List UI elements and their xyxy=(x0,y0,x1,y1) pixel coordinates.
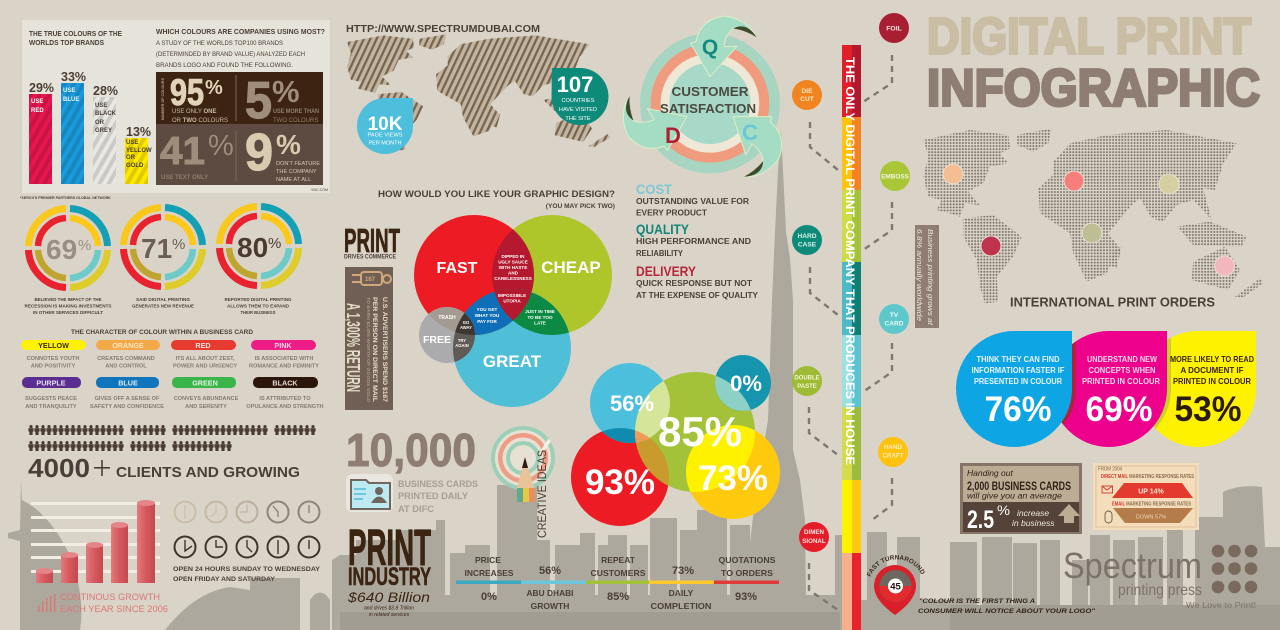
pill: pink xyxy=(249,340,319,370)
ring chart 69%: IN OTHER SERVICES DIFFICULT xyxy=(33,310,103,316)
text: 76%: PRESENTED IN COLOUR xyxy=(974,377,1062,386)
city skyline background xyxy=(8,130,1280,630)
bar: black or grey 28%: GREY xyxy=(95,128,112,134)
pill: red: POWER AND URGENCY xyxy=(173,364,237,370)
finish badge: die cut: DIE xyxy=(802,88,813,95)
bar: yellow or gold 13%: GOLD xyxy=(126,163,144,169)
icon: pencil xyxy=(517,457,535,502)
venn diagram: fast cheap great free: AGAIN xyxy=(455,343,469,348)
pill: yellow: AND POSITIVITY xyxy=(31,364,75,370)
cost quality delivery list: COST xyxy=(636,181,672,197)
icon: person with 167: 167 xyxy=(365,277,376,283)
finish badge: hard case xyxy=(792,225,822,255)
finish badge: tv card: CARD xyxy=(884,320,904,328)
icon: id card xyxy=(346,474,393,512)
stat 9%: % xyxy=(276,129,301,160)
venn diagram: fast cheap great free: YOU GET xyxy=(477,307,498,312)
venn diagram: fast cheap great free: LATE xyxy=(534,320,546,326)
stat 41%: % xyxy=(208,130,234,162)
fast turnaround pin: FAST TURNAROUND xyxy=(866,555,924,576)
opening hours text: OPEN 24 HOURS SUNDAY TO WEDNESDAY xyxy=(173,566,321,573)
customer satisfaction diagram xyxy=(611,16,795,187)
bar: red 29%: RED xyxy=(31,108,44,114)
pill: pink: ROMANCE AND FEMINITY xyxy=(249,364,319,370)
spectrum logo: We Love to Print! xyxy=(1186,600,1256,610)
panel: character of colour xyxy=(21,329,324,410)
spectrum logo: printing press xyxy=(1118,582,1202,599)
pill: black: BLACK xyxy=(272,378,298,388)
ring chart 80%: 80 xyxy=(237,232,268,263)
badge: 107 countries xyxy=(552,68,608,125)
text: 53%: MORE LIKELY TO READ xyxy=(1170,355,1254,364)
business card callout xyxy=(960,463,1082,534)
text: 69%: CONCEPTS WHEN xyxy=(1088,366,1156,375)
clients headline: CLIENTS AND GROWING xyxy=(116,464,300,481)
pill: orange: ORANGE xyxy=(112,341,144,350)
heading: which colours: A STUDY OF THE WORLDS TOP100 BRANDS xyxy=(156,40,284,47)
growth bar chart xyxy=(31,500,168,614)
pill: blue: GIVES OFF A SENSE OF xyxy=(95,396,160,402)
bar: yellow or gold 13% xyxy=(125,125,152,184)
stat 9%: DON'T FEATURE xyxy=(276,161,320,167)
title xyxy=(927,8,1260,118)
finish badge: emboss: EMBOSS xyxy=(881,174,910,180)
arrow: cost xyxy=(710,100,795,187)
stat table: NUMBER OF COLOURS xyxy=(161,77,165,120)
icon: up arrow xyxy=(1058,504,1080,523)
colour statistic teardrops xyxy=(956,331,1256,447)
business card callout: Handing out xyxy=(967,468,1013,478)
venn heading: (YOU MAY PICK TWO) xyxy=(546,203,615,210)
pill: black: IS ATTRIBUTED TO xyxy=(259,396,311,402)
stat 41%: 41 xyxy=(160,130,205,173)
print drives commerce heading: PRINT xyxy=(344,222,400,259)
print drives commerce heading: DRIVES COMMERCE xyxy=(344,254,396,260)
text: 69% xyxy=(1082,355,1160,429)
overlapping percentage circles: 0% xyxy=(730,371,762,396)
timeline statistics: 93% xyxy=(735,591,757,603)
cost quality delivery list: RELIABILITY xyxy=(636,249,684,258)
text: 76%: THINK THEY CAN FIND xyxy=(976,355,1060,364)
bar: yellow or gold 13%: USE xyxy=(126,140,138,146)
text: 69%: PRINTED IN COLOUR xyxy=(1082,377,1160,386)
map caption: INTERNATIONAL PRINT ORDERS xyxy=(1010,296,1215,310)
pill: orange xyxy=(96,340,160,370)
10,000 business cards: BUSINESS CARDS xyxy=(398,479,478,490)
source note: *INC.COM xyxy=(311,188,328,192)
badge: 10K page views: 10K xyxy=(368,114,403,135)
print industry block: PRINT xyxy=(348,519,431,576)
print industry block: $640 Billion xyxy=(347,589,430,605)
stat table xyxy=(156,72,323,185)
icon: mouse xyxy=(1105,511,1112,523)
heading: character of colour: THE CHARACTER OF COLOUR WITHIN A BUSINESS CARD xyxy=(71,329,253,336)
opening hours text: OPEN FRIDAY AND SATURDAY xyxy=(173,576,276,583)
timeline statistics: TO ORDERS xyxy=(721,568,773,578)
business card callout: in business xyxy=(1012,518,1055,528)
timeline statistics: QUOTATIONS xyxy=(718,555,776,565)
bar: black or grey 28%: BLACK xyxy=(95,111,117,117)
opening hours text xyxy=(173,566,321,583)
pill: pink: PINK xyxy=(274,341,292,350)
pill: orange: AND CONTROL xyxy=(105,364,147,370)
stat 9%: THE COMPANY xyxy=(276,169,317,175)
footnote: *XEROX'S PREMIER PARTNERS GLOBAL NETWORK xyxy=(20,196,111,200)
overlapping percentage circles: 56% xyxy=(610,391,654,416)
bar: red 29%: 29% xyxy=(29,81,54,95)
heading: true colours: WORLDS TOP BRANDS xyxy=(29,38,104,47)
pill: green: GREEN xyxy=(192,378,218,388)
ring chart 69%: % xyxy=(78,237,91,254)
timeline statistics: DAILY xyxy=(669,588,694,598)
overlapping percentage circles: 73% xyxy=(698,459,768,498)
stat 5%: USE MORE THAN xyxy=(273,109,319,115)
venn diagram: fast cheap great free: PAY FOR xyxy=(477,319,497,324)
spectrum logo: Spectrum xyxy=(1063,545,1202,586)
pill: blue xyxy=(90,377,164,410)
timeline statistics: 56% xyxy=(539,565,561,577)
stat 95% xyxy=(170,72,228,124)
pill: yellow xyxy=(21,340,86,370)
stat 5%: TWO COLOURS xyxy=(273,118,318,124)
badge: 107 countries: THE SITE xyxy=(565,116,591,122)
ring chart 71%: % xyxy=(172,236,185,253)
finish badge: die cut xyxy=(792,80,822,110)
pill: green: CONVEYS ABUNDANCE xyxy=(174,396,239,402)
badge: 10K page views: PAGE VIEWS xyxy=(368,132,403,138)
finish badge: dimensional: DIMEN xyxy=(804,529,824,536)
timeline statistics: GROWTH xyxy=(531,601,569,611)
vertical colour column xyxy=(842,45,861,630)
panel: direct mail return: PER PERSON ON DIRECT MAIL xyxy=(371,297,378,402)
pill: red: RED xyxy=(195,341,211,350)
text: 53%: 53% xyxy=(1174,390,1242,429)
venn diagram: fast cheap great free: GREAT xyxy=(483,352,542,371)
ring chart 80%: THEIR BUSINESS xyxy=(240,310,276,316)
venn heading xyxy=(378,189,615,210)
ring chart 80%: REPORTED DIGITAL PRINTING xyxy=(224,297,292,303)
finish badge: hand craft xyxy=(878,437,908,467)
pill: orange: CREATES COMMAND xyxy=(97,356,155,362)
stat 41% xyxy=(160,130,234,181)
stat 95%: % xyxy=(205,77,223,99)
cost quality delivery list: HIGH PERFORMANCE AND xyxy=(636,237,751,246)
venn diagram: fast cheap great free: DIPPED IN xyxy=(502,254,525,259)
venn diagram: fast cheap great free: UTOPIA xyxy=(503,298,521,304)
bar: yellow or gold 13%: OR xyxy=(126,155,136,161)
venn diagram: fast cheap great free: IMPOSSIBLE xyxy=(498,293,526,298)
customer satisfaction diagram: D xyxy=(665,123,681,148)
finish badge: hard case: CASE xyxy=(798,242,817,248)
spectrum logo xyxy=(1063,545,1257,610)
venn diagram: fast cheap great free: FREE xyxy=(423,334,451,346)
stat 5% xyxy=(245,72,319,130)
creative ideas icon: CREATIVE IDEAS xyxy=(535,450,549,538)
stat 95%: USE ONLY ONE xyxy=(172,109,216,115)
pill: purple: PURPLE xyxy=(36,378,66,388)
striped world map xyxy=(347,34,610,151)
growth note box: 6.8% annually worldwide xyxy=(915,229,924,321)
bar: black or grey 28%: USE xyxy=(95,103,107,109)
text: 69%: UNDERSTAND NEW xyxy=(1087,355,1158,364)
fast turnaround pin xyxy=(866,555,924,615)
overlapping percentage circles xyxy=(571,355,780,526)
venn diagram: fast cheap great free: TRY xyxy=(458,338,466,343)
timeline statistics: ABU DHABI xyxy=(526,588,574,598)
stat 41%: USE TEXT ONLY xyxy=(161,175,208,181)
heading: which colours: (DETERMINDED BY BRAND VALUE) ANALYZED EACH xyxy=(156,51,305,58)
finish badge: double paste: PASTE xyxy=(797,384,817,390)
business card callout: 2.5 xyxy=(967,506,994,534)
bar: blue 33%: USE xyxy=(63,88,75,94)
cost quality delivery list: OUTSTANDING VALUE FOR xyxy=(636,197,749,206)
website heading: HTTP://WWW.SPECTRUMDUBAI.COM xyxy=(346,23,540,35)
growth bar chart: EACH YEAR SINCE 2006 xyxy=(60,604,168,614)
pill: black: OPULANCE AND STRENGTH xyxy=(246,404,324,410)
quote: CONSUMER WILL NOTICE ABOUT YOUR LOGO" xyxy=(918,608,1096,615)
timeline statistics xyxy=(456,555,779,611)
ring chart 69% xyxy=(24,208,112,316)
pill: purple xyxy=(22,377,81,410)
timeline statistics: COMPLETION xyxy=(650,601,712,611)
heading: which colours: WHICH COLOURS ARE COMPANIES USING MOST? xyxy=(156,27,325,36)
timeline statistics: 85% xyxy=(607,591,629,603)
panel: direct mail return: TO EARN $2,095 WORTH OF GOODS SOLD xyxy=(366,297,371,402)
panel: direct mail return xyxy=(343,267,393,410)
pill: red: ITS ALL ABOUT ZEST, xyxy=(176,356,235,362)
ring chart 71%: SAID DIGITAL PRINTING xyxy=(136,297,190,303)
ring chart 69%: RECESSION IS MAKING INVESTMENTS xyxy=(24,304,112,310)
venn diagram: fast cheap great free: AND xyxy=(508,270,519,276)
panel: true colours of top brands xyxy=(22,20,330,193)
stat 5%: % xyxy=(272,74,300,109)
print industry block: in related services xyxy=(369,612,410,618)
bar: yellow or gold 13%: 13% xyxy=(126,125,151,139)
10,000 business cards: 10,000 xyxy=(346,424,476,476)
panel: direct mail return: A 1,300% RETURN xyxy=(343,303,363,392)
bar: black or grey 28%: OR xyxy=(95,120,105,126)
people pictogram xyxy=(28,425,316,451)
badge: 10K page views xyxy=(357,98,413,154)
pill: green: AND SERENITY xyxy=(185,404,227,410)
badge: 10K page views: PER MONTH xyxy=(368,140,402,146)
customer satisfaction diagram: SATISFACTION xyxy=(660,101,756,116)
venn diagram: fast cheap great free: FAST xyxy=(437,260,478,277)
customer satisfaction diagram: Q xyxy=(702,36,718,59)
cost quality delivery list: AT THE EXPENSE OF QUALITY xyxy=(636,291,759,300)
marketing response callout: DOWN 57% xyxy=(1136,514,1166,520)
pill: red xyxy=(171,340,237,370)
pill: yellow: YELLOW xyxy=(38,341,69,350)
marketing response callout: UP 14% xyxy=(1138,488,1165,496)
teardrop: 76% blue xyxy=(956,331,1072,447)
clients headline xyxy=(28,453,300,483)
finish badge: tv card: TV xyxy=(890,312,899,319)
bar: blue 33% xyxy=(61,70,86,184)
dashed connectors xyxy=(809,55,892,610)
creative ideas icon xyxy=(491,426,555,538)
bar: black or grey 28%: 28% xyxy=(93,84,118,98)
pill: purple: AND TRANQUILITY xyxy=(25,404,77,410)
finish badge: emboss xyxy=(880,161,910,191)
ring chart 80%: ALLOWS THEM TO EXPAND xyxy=(227,304,290,310)
pill: purple: SUGGESTS PEACE xyxy=(25,396,77,402)
customer satisfaction diagram: C xyxy=(742,120,758,145)
finish badge: hard case: HARD xyxy=(797,233,817,240)
marketing response callout: EMAIL MARKETING RESPONSE RATES xyxy=(1112,502,1192,508)
text: 53%: A DOCUMENT IF xyxy=(1180,366,1244,375)
growth note box xyxy=(915,225,939,328)
cost quality delivery list: QUICK RESPONSE BUT NOT xyxy=(636,279,752,288)
quote: "COLOUR IS THE FIRST THING A xyxy=(919,598,1035,605)
bar: blue 33%: 33% xyxy=(61,70,86,84)
print industry block xyxy=(347,519,431,618)
venn diagram: fast cheap great free: UGLY SAUCE xyxy=(498,260,528,264)
business card callout: increase xyxy=(1017,508,1049,518)
10,000 business cards: AT DIFC xyxy=(398,504,434,515)
print drives commerce heading xyxy=(344,222,400,260)
text: 53%: PRINTED IN COLOUR xyxy=(1173,377,1251,386)
clients headline: 4000 xyxy=(28,453,90,483)
icon: person with 167 xyxy=(352,272,391,285)
fast turnaround pin: 45 xyxy=(890,582,901,592)
customer satisfaction diagram: CUSTOMER xyxy=(672,84,749,99)
icon: envelope xyxy=(1102,486,1112,493)
business card callout: 2,000 BUSINESS CARDS xyxy=(967,479,1071,493)
timeline statistics: PRICE xyxy=(475,555,501,565)
venn diagram: fast cheap great free: TRASH xyxy=(438,315,456,321)
text: 76% xyxy=(972,355,1065,429)
finish badge: double paste: DOUBLE xyxy=(794,376,820,382)
arrow: quality xyxy=(691,16,757,77)
timeline statistics: 73% xyxy=(672,565,694,577)
heading: true colours xyxy=(29,29,122,47)
text: 76%: INFORMATION FASTER IF xyxy=(972,366,1065,375)
stat 5%: 5 xyxy=(245,72,272,130)
finish badge: foil xyxy=(879,13,909,43)
growth note box: Business printing grows at xyxy=(926,229,935,326)
text: 53% xyxy=(1170,355,1254,429)
ring chart 69%: BELIEVED THE IMPACT OF THE xyxy=(34,297,102,303)
small bars icon xyxy=(38,594,56,612)
finish badge: foil: FOIL xyxy=(886,26,902,32)
business card callout: will give you an average xyxy=(967,492,1063,500)
heading: true colours: THE TRUE COLOURS OF THE xyxy=(29,29,122,38)
badge: 107 countries: HAVE VISITED xyxy=(559,107,597,113)
pill: pink: IS ASSOCIATED WITH xyxy=(255,356,313,362)
venn diagram: fast cheap great free: JUST IN TIME xyxy=(525,309,555,314)
cost quality delivery list: EVERY PRODUCT xyxy=(636,208,707,218)
cost quality delivery list: QUALITY xyxy=(636,221,690,237)
pill: black xyxy=(246,377,324,410)
bar: red 29% xyxy=(29,81,54,184)
dotted world map xyxy=(923,128,1263,310)
venn diagram: fast cheap great free: WITH HASTE xyxy=(499,265,527,270)
cost quality delivery list: DELIVERY xyxy=(636,263,697,279)
timeline statistics: REPEAT xyxy=(601,555,636,565)
cost quality delivery list xyxy=(636,181,759,300)
overlapping percentage circles: 93% xyxy=(585,463,655,502)
teardrop: 69% pink xyxy=(1062,331,1167,447)
ring chart 80%: % xyxy=(268,235,281,252)
stat 95%: 95 xyxy=(170,72,204,113)
venn diagram: fast cheap great free: AWAY xyxy=(460,325,472,330)
timeline statistics: INCREASES xyxy=(464,568,514,578)
bar: black or grey 28% xyxy=(93,84,118,184)
10,000 business cards: PRINTED DAILY xyxy=(398,491,469,502)
stat 9%: 9 xyxy=(245,124,273,182)
pill: blue: SAFETY AND CONFIDENCE xyxy=(90,404,164,410)
finish badge: die cut: CUT xyxy=(800,96,814,103)
ring chart 69%: 69 xyxy=(46,234,77,265)
venn diagram: fast cheap great free: WHAT YOU xyxy=(475,313,500,318)
growth bar chart: CONTINOUS GROWTH xyxy=(60,592,160,602)
ring chart 80% xyxy=(220,206,298,316)
text: 69%: 69% xyxy=(1086,390,1152,429)
timeline statistics: 0% xyxy=(481,591,497,603)
ring chart 71% xyxy=(124,208,202,310)
overlapping percentage circles: 85% xyxy=(658,408,742,455)
venn diagram: fast cheap great free: GO xyxy=(463,320,470,325)
pill: yellow: CONNOTES YOUTH xyxy=(27,356,79,362)
finish badge: dimensional xyxy=(799,522,829,552)
stat 95%: OR TWO COLOURS xyxy=(172,118,228,124)
marketing response callout xyxy=(1093,463,1199,530)
venn diagram: fast cheap great free xyxy=(414,215,612,407)
stat 9% xyxy=(245,124,320,183)
bar: blue 33%: BLUE xyxy=(63,97,79,103)
venn diagram: fast cheap great free: CARELESSNESS xyxy=(494,276,532,281)
teardrop: 53% yellow xyxy=(1154,331,1256,447)
ring chart 71%: 71 xyxy=(141,233,172,264)
panel: direct mail return: U.S. ADVERTISERS SPEND $167 xyxy=(381,297,388,402)
heading: which colours xyxy=(156,27,325,69)
opening hours clocks xyxy=(174,502,320,558)
business card callout: % xyxy=(997,502,1010,518)
tower: burj xyxy=(745,130,820,630)
finish badge: dimensional: SIONAL xyxy=(802,538,826,545)
vertical colour column: THE ONLY DIGITAL PRINT COMPANY THAT PRODUCES IN HOUSE xyxy=(843,57,857,465)
venn diagram: fast cheap great free: TO BE TOO xyxy=(527,315,553,320)
pill: green xyxy=(172,377,239,410)
bar: red 29%: USE xyxy=(31,99,43,105)
venn heading: HOW WOULD YOU LIKE YOUR GRAPHIC DESIGN? xyxy=(378,189,615,200)
quote xyxy=(918,598,1096,615)
marketing response callout: FROM 2004 xyxy=(1098,466,1122,472)
finish badge: hand craft: HAND xyxy=(884,444,902,451)
bar: yellow or gold 13%: YELLOW xyxy=(126,148,152,154)
heading: which colours: BRANDS LOGO AND FOUND THE FOLLOWING. xyxy=(156,62,293,69)
timeline statistics: CUSTOMERS xyxy=(590,568,646,578)
marketing response callout: DIRECT MAIL MARKETING RESPONSE RATES xyxy=(1101,474,1195,480)
stat 9%: NAME AT ALL xyxy=(276,177,311,183)
badge: 107 countries: 107 xyxy=(557,72,593,97)
10,000 business cards xyxy=(346,424,478,515)
finish badge: double paste xyxy=(792,366,822,396)
print industry block: and drives $3.8 Trillion xyxy=(364,606,414,612)
badge: 107 countries: COUNTRIES xyxy=(562,98,595,104)
venn diagram: fast cheap great free: CHEAP xyxy=(541,258,601,277)
arrow: delivery xyxy=(611,76,697,164)
finish badge: hand craft: CRAFT xyxy=(883,452,904,460)
pill: blue: BLUE xyxy=(118,378,138,388)
text: 76%: 76% xyxy=(984,390,1052,429)
finish badge: tv card xyxy=(879,304,909,334)
print industry block: INDUSTRY xyxy=(348,563,431,591)
ring chart 71%: GENERATES NEW REVENUE xyxy=(132,304,195,310)
